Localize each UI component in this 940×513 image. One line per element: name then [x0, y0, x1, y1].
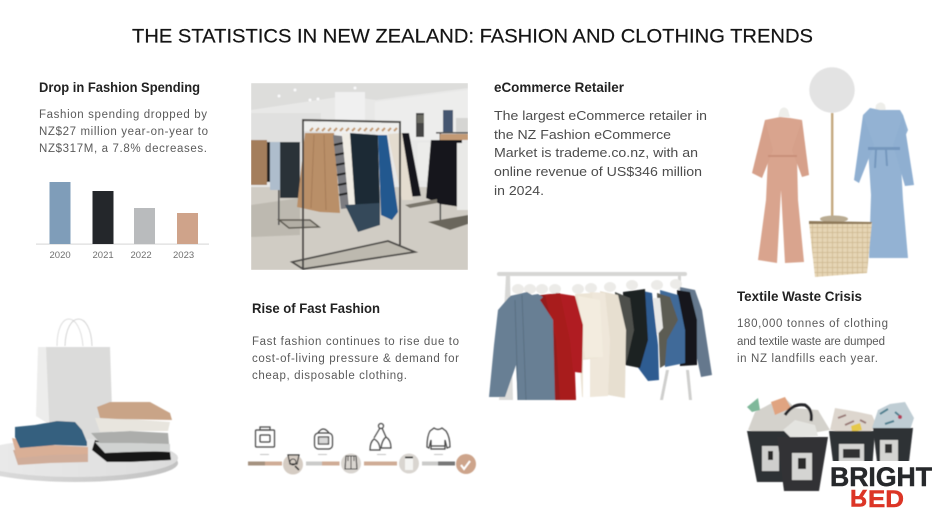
main rack clothes: [297, 122, 421, 232]
icon: sweater: [427, 428, 450, 449]
panel: rise of fast fashion: [252, 300, 459, 382]
icon: people network: [370, 424, 391, 450]
text block: trademe: the NZ Fashion eCommerce: [494, 127, 671, 142]
photo: clothing store interior: [251, 83, 468, 270]
heading: rise of fast fashion: Rise of Fast Fashion: [252, 300, 380, 316]
text block: trademe: Market is trademe.co.nz, with an: [494, 145, 698, 160]
icon row: fast fashion process: [248, 424, 476, 474]
bin 1: [747, 431, 790, 482]
text block: trademe: in 2024.: [494, 183, 544, 198]
text block: landfill: 180,000 tonnes of clothing: [737, 318, 888, 330]
illustration: overflowing waste bins: [747, 397, 914, 491]
bin 3: [829, 431, 875, 470]
bar 2020: [50, 182, 70, 244]
logo word: red: [850, 484, 904, 513]
year labels: 2023: [173, 250, 194, 261]
logo word: red: ED: [868, 486, 904, 513]
icon dashes: [260, 454, 443, 455]
dark and blue shirts: [615, 287, 712, 381]
text block: spending drop: [39, 109, 208, 155]
illustration: clothes rack: [489, 272, 712, 400]
text block: spending drop: NZ$27 million year-on-year to: [39, 126, 208, 138]
wall displays: [416, 110, 468, 137]
floor: [251, 187, 468, 270]
bar 2021: [92, 191, 114, 244]
red shirts: [533, 293, 583, 400]
jumpsuit: [752, 108, 809, 263]
icon: jacket circle: [341, 454, 361, 474]
illustration: outfits and basket: [752, 67, 914, 277]
icon: backpack: [314, 429, 332, 449]
bar 2023: [177, 213, 198, 244]
waste piles: [747, 397, 914, 435]
shopping bag: [36, 319, 113, 440]
text block: trademe: [494, 108, 707, 198]
dress: [854, 102, 914, 258]
text block: spending drop: NZ$317M, a 7.8% decreases.: [39, 143, 207, 155]
platform: [0, 439, 178, 482]
cream shirts: [575, 291, 626, 398]
logo word: bright: BRIGHT: [830, 462, 932, 492]
year labels: [50, 250, 194, 261]
year labels: 2022: [130, 250, 152, 261]
panel: textile waste crisis: [737, 288, 888, 365]
right stack of clothes: [91, 402, 172, 462]
panel: ecommerce retailer: [494, 79, 707, 198]
logo word: red: R: [850, 484, 867, 511]
bin 4: [873, 428, 913, 470]
title: THE STATISTICS IN NEW ZEALAND: FASHION AND CLOTHING TRENDS: [132, 26, 813, 48]
progress bar 1: [248, 462, 282, 466]
bin 2: [777, 420, 828, 491]
bar 2022: [134, 208, 155, 244]
bar chart: [36, 182, 209, 261]
icon: price tag circle: [283, 454, 303, 474]
text block: landfill: and textile waste are dumped: [737, 336, 885, 348]
year labels: 2020: [50, 250, 71, 261]
hangers: [512, 279, 682, 294]
heading: drop in fashion spending: Drop in Fashion Spending: [39, 79, 200, 95]
ceiling: [251, 83, 468, 110]
woven basket: [809, 216, 872, 277]
denim shirt: [489, 275, 555, 400]
text block: fast fashion: [252, 336, 459, 382]
heading: textile waste crisis: Textile Waste Crisis: [737, 288, 862, 304]
year labels: 2021: [92, 250, 114, 261]
text block: trademe: online revenue of US$346 million: [494, 164, 702, 179]
background rack right: [405, 132, 468, 230]
text block: trademe: The largest eCommerce retailer in: [494, 108, 707, 123]
progress bar 3: [364, 462, 397, 466]
logo: Bright Red: [830, 461, 940, 513]
text block: landfill: in NZ landfills each year.: [737, 353, 878, 365]
progress bar 2: [306, 462, 340, 466]
text block: landfill: [737, 318, 888, 365]
circular sign: [809, 67, 855, 220]
progress bar 4: [422, 462, 455, 466]
main rack frame: [292, 120, 415, 269]
hangers: [310, 128, 397, 131]
text block: fast fashion: cheap, disposable clothing.: [252, 370, 407, 382]
illustration: shopping bag and folded clothes: [0, 319, 178, 482]
heading: ecommerce retailer: eCommerce Retailer: [494, 79, 625, 95]
rack frame: [497, 272, 692, 400]
left stack of clothes: [12, 421, 88, 465]
icon: cylinder circle: [399, 454, 419, 474]
text block: spending drop: Fashion spending dropped by: [39, 109, 207, 121]
text block: fast fashion: Fast fashion continues to rise due to: [252, 336, 459, 348]
icon: checkmark circle: [456, 454, 476, 474]
text block: fast fashion: cost-of-living pressure & demand for: [252, 353, 459, 365]
panel: drop in fashion spending: [36, 79, 209, 261]
icon: garment tag: [256, 427, 274, 447]
background rack left: [251, 140, 319, 228]
